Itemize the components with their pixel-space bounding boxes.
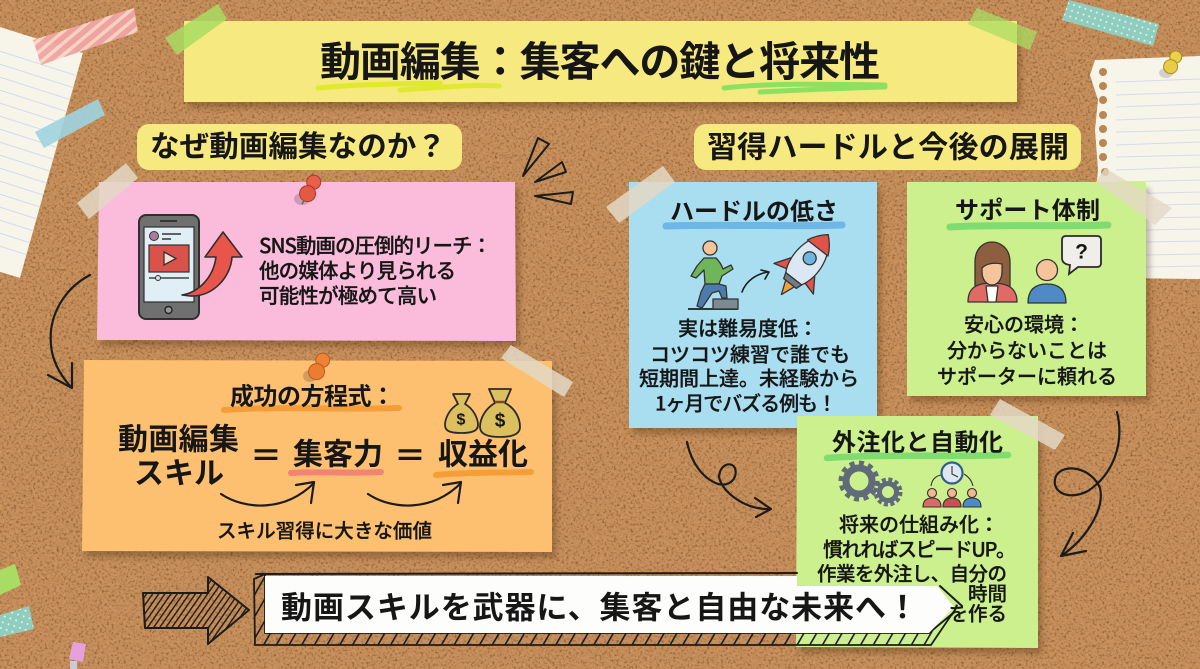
notebook paper: right: [1090, 56, 1200, 279]
text: SNS reach: [259, 229, 492, 309]
icon: rocket: [762, 219, 848, 310]
icon: person with question: [1028, 260, 1066, 303]
formula heading: 成功の方程式：: [230, 384, 395, 410]
arrow: attraction to monetization: [368, 482, 461, 506]
banner body: [265, 576, 954, 633]
notebook paper: left: [0, 27, 90, 278]
tape: green on title right: [968, 8, 1037, 50]
tape: green bottom left: [0, 564, 21, 595]
arrow: pink note to orange note: [48, 275, 90, 388]
icon: person climbing step: [688, 241, 738, 309]
tape: beige on orange note: [501, 345, 573, 397]
term: monetization: 収益化: [438, 438, 528, 472]
icon: gears: [841, 463, 900, 504]
text: support: サポーターに頼れる: [937, 360, 1117, 390]
term: video editing skill: 動画編集: [118, 424, 239, 456]
heading pill: why video editing: なぜ動画編集なのか？: [150, 130, 446, 164]
hatched arrow: [143, 577, 249, 644]
icon: money bags: [445, 389, 520, 437]
text: low hurdle: 1ヶ月でバズる例も！: [655, 388, 837, 416]
icon: money bags: $: [457, 412, 466, 428]
pin: orange: [303, 350, 333, 382]
text: outsourcing: 作業を外注し、自分の: [817, 558, 1007, 586]
icon: question bubble: [1062, 236, 1101, 274]
text: SNS reach: SNS動画の圧倒的リーチ：: [259, 229, 492, 259]
tape: blue on left paper: [35, 99, 105, 148]
tape: pink striped: [33, 8, 138, 65]
tape: beige on pink note: [77, 163, 138, 219]
text: support: 安心の環境：: [964, 308, 1084, 338]
term: video editing skill: [118, 424, 239, 490]
banner shadow band: [254, 574, 952, 645]
arrow: green note squiggle: [1055, 412, 1119, 556]
tape: teal dotted top right: [1062, 0, 1159, 46]
heading: support: サポート体制: [955, 198, 1100, 224]
text: outsourcing: を作る: [948, 598, 1007, 626]
icon: phone with video: [139, 215, 242, 319]
title highlight: green: [724, 84, 885, 92]
text: outsourcing: 時間: [968, 578, 1007, 606]
banner text: 動画スキルを武器に、集客と自由な未来へ！: [281, 590, 918, 626]
text: low hurdle: 実は難易度低：: [678, 312, 818, 342]
panel: low hurdle (blue note): [629, 182, 877, 428]
title note: [184, 21, 1017, 102]
panel: outsourcing and automation (green note): [796, 416, 1038, 648]
text: low hurdle: 短期間上達。未経験から: [639, 362, 859, 392]
heading pill: hurdles and next steps: 習得ハードルと今後の展開: [707, 132, 1069, 164]
text: outsourcing: 将来の仕組み化：: [839, 508, 999, 538]
arrow: skill to attraction: [221, 482, 314, 506]
equals sign: ＝: [250, 438, 282, 474]
title highlight: yellow: [318, 83, 499, 90]
text: SNS reach: 可能性が極めて高い: [259, 279, 437, 309]
equals sign: ＝: [394, 438, 426, 474]
caption: value of the skill: スキル習得に大きな価値: [217, 514, 432, 544]
panel: SNS reach (pink note): [97, 182, 516, 341]
icon: supporter woman: [968, 242, 1017, 302]
title text: 動画編集：集客への鍵と将来性: [320, 39, 880, 85]
text: outsourcing: [817, 508, 1016, 626]
pin: yellow: [1159, 48, 1185, 78]
heading pill: hurdles and next steps: [694, 124, 1081, 170]
tape: beige on blue note: [606, 166, 675, 223]
text: low hurdle: [639, 312, 859, 416]
term: video editing skill: スキル: [134, 458, 224, 490]
icon: question bubble: ?: [1075, 240, 1088, 264]
arrow: blue note squiggle: [687, 442, 771, 517]
heading: outsourcing: 外注化と自動化: [832, 430, 1003, 456]
pin: red: [294, 172, 324, 208]
icon: money bags: $: [495, 410, 506, 432]
tape: beige on lower green note: [990, 399, 1065, 450]
text: SNS reach: 他の媒体より見られる: [259, 254, 456, 284]
icon: small arrow: [742, 270, 769, 292]
banner: call to action: [254, 573, 962, 645]
term: customer attraction: 集客力: [293, 438, 383, 472]
text: support: [937, 308, 1117, 390]
tape: teal bottom left: [0, 606, 34, 637]
icon: team and clock: [923, 462, 981, 507]
burst marks: [523, 138, 573, 204]
text: low hurdle: コツコツ練習で誰でも: [650, 338, 850, 368]
tape: beige on green note: [1096, 168, 1172, 225]
panel: support system (green note): [907, 182, 1146, 396]
panel: success formula (orange note): [82, 360, 552, 552]
tape: green on title left: [165, 4, 227, 55]
tape: pink bottom left: [69, 642, 86, 669]
text: support: 分からないことは: [947, 334, 1107, 364]
text: outsourcing: 慣れればスピードUP。: [823, 534, 1016, 562]
heading pill: why video editing: [137, 124, 462, 170]
heading: low hurdle: ハードルの低さ: [670, 198, 838, 226]
